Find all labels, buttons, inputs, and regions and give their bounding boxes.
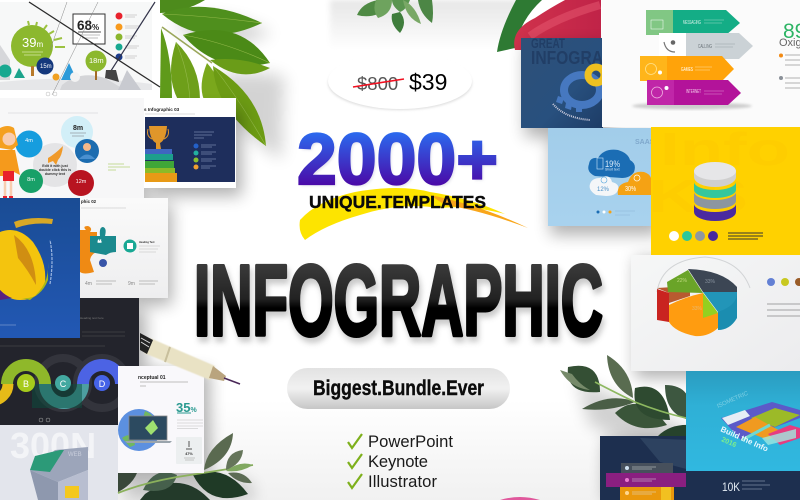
panel: circles slide: 4m bbox=[25, 138, 33, 144]
panel: puzzle slide: phic 02 bbox=[81, 199, 97, 204]
panel: puzzle slide bbox=[80, 198, 168, 298]
headline: 2000+: 2000+ bbox=[297, 120, 498, 200]
arrow: games: GAMES bbox=[681, 67, 693, 73]
icon: orange cloud: 30% bbox=[625, 186, 636, 193]
panel: puzzle slide: ❝ bbox=[97, 238, 102, 248]
icon: blue 4m circle bbox=[16, 130, 42, 158]
icon: blue gear bbox=[556, 75, 600, 112]
panel: dark slide: D bbox=[99, 379, 106, 389]
icon: gold sphere bbox=[0, 218, 53, 300]
panel: circles slide: 12m bbox=[76, 179, 87, 185]
panel: top left slide: 68% bbox=[77, 18, 99, 33]
panel: cloud slide: SAAS bbox=[635, 139, 655, 146]
panel: yellow slide: KS bbox=[648, 170, 748, 222]
card: 47% bbox=[176, 437, 202, 464]
pill: biggest bundle ever: Biggest.Bundle.Ever bbox=[313, 377, 484, 400]
pill: biggest bundle ever bbox=[287, 368, 510, 409]
panel: gear slide bbox=[521, 35, 604, 128]
chart: 3d pie: 33% bbox=[705, 279, 716, 285]
panel: dark slide: Heading text here bbox=[80, 316, 104, 320]
panel: gear slide: INFOGRA bbox=[531, 48, 603, 68]
panel: top left slide bbox=[0, 0, 160, 98]
panel: conceptual slide: 35% bbox=[176, 400, 197, 415]
arrow: calling: CALLING bbox=[698, 44, 712, 50]
arrow: games bbox=[640, 56, 734, 81]
panel: circles slide: Edit it with just bbox=[42, 164, 69, 168]
item: Keynote: Keynote bbox=[368, 452, 428, 471]
icon: red 12m circle bbox=[68, 170, 94, 196]
chart: 3d pie: 33% bbox=[692, 306, 703, 312]
new price: $39 bbox=[409, 69, 447, 95]
arrow: calling bbox=[659, 33, 753, 59]
panel: cloud slide bbox=[548, 128, 655, 226]
panel: gear slide: GREAT bbox=[531, 35, 565, 51]
brush stroke bbox=[300, 188, 528, 240]
icon: light blue 8m circle bbox=[61, 116, 93, 148]
chart: 3d pie: 22% bbox=[677, 278, 688, 284]
panel: pie slide bbox=[631, 255, 800, 371]
icon: globe and laptop bbox=[118, 409, 172, 451]
text box: 68% bbox=[73, 14, 105, 44]
panel: cyan slide: ISOMETRIC bbox=[716, 391, 750, 410]
arrow: messaging: MESSAGING bbox=[683, 20, 701, 26]
icon: green 8m circle bbox=[19, 169, 43, 193]
panel: navy slide: 10K bbox=[722, 480, 740, 494]
panel: puzzle slide: 9m bbox=[128, 281, 135, 287]
illustration: leaves right bbox=[560, 355, 691, 436]
panel: circles slide: 8m bbox=[27, 177, 35, 183]
panel: puzzle slide: 4m bbox=[85, 281, 92, 287]
panel: dark slide bbox=[0, 298, 139, 425]
icon: tree 15m bbox=[36, 58, 54, 74]
chart: isometric blocks bbox=[721, 402, 800, 445]
headline: 2000+: 2000+ bbox=[299, 122, 500, 202]
legend: pie dots bbox=[767, 278, 800, 286]
illustration: pen bbox=[140, 333, 240, 384]
illustration: leaves bottom bbox=[118, 433, 253, 500]
panel: blue gold slide bbox=[0, 198, 80, 338]
icon: yellow gear bbox=[588, 67, 604, 83]
panel: conceptual slide: 47% bbox=[185, 452, 193, 456]
illustration: pink flower bottom bbox=[500, 497, 540, 500]
legend: circles bbox=[669, 231, 718, 241]
panel: circles slide bbox=[0, 98, 144, 198]
arrow: messaging bbox=[646, 10, 740, 35]
illustration: red flower top right bbox=[497, 0, 601, 52]
chart: coloured steps bbox=[145, 149, 177, 182]
icon: tree 39m bbox=[11, 25, 53, 67]
icon: girl figure bbox=[0, 126, 20, 197]
panel: puzzle slide: Heading Text bbox=[139, 241, 155, 244]
list: stacked cards bbox=[606, 463, 686, 500]
panel: top left slide: 18m bbox=[89, 56, 104, 65]
illustration: leaves top centre bbox=[357, 0, 433, 33]
illustration: green leaves top bbox=[160, 0, 270, 146]
panel: dark slide: C bbox=[60, 379, 67, 389]
panel: circles slide: double click this is bbox=[39, 168, 71, 172]
panel: dark slide: B bbox=[23, 379, 29, 389]
leaf shadows bbox=[125, 17, 690, 500]
title: infographic bbox=[194, 245, 605, 362]
panel: cyan slide: Build the Info bbox=[719, 425, 770, 454]
panel: conceptual slide bbox=[118, 366, 204, 473]
panel: circles slide: dummy text bbox=[45, 172, 66, 176]
subheading: unique templates: UNIQUE.TEMPLATES bbox=[309, 192, 486, 212]
item: PowerPoint: PowerPoint bbox=[368, 432, 453, 451]
panel: top left slide: 15m bbox=[40, 64, 52, 70]
panel: circles slide: 8m bbox=[73, 125, 83, 132]
panel: arrows slide bbox=[602, 0, 800, 127]
icon: blue cloud bbox=[588, 150, 635, 178]
price badge bbox=[328, 53, 472, 110]
chart: arcs B C D bbox=[0, 358, 127, 408]
panel: top left slide: 39m bbox=[22, 35, 43, 50]
icon: blue cloud: Short text bbox=[605, 168, 620, 172]
panel: cube slide: WEB bbox=[68, 452, 82, 458]
panel: cube slide: 300N bbox=[10, 425, 96, 466]
panel: yellow slide bbox=[648, 123, 800, 255]
chart: cylinder stack bbox=[694, 162, 736, 221]
icon: blue cloud: 19% bbox=[605, 159, 620, 169]
list: coloured dots bbox=[116, 12, 139, 60]
panel: cyan slide bbox=[686, 371, 800, 471]
old price: $800 bbox=[357, 73, 398, 94]
panel: yellow slide: Info bbox=[660, 123, 790, 175]
panel: conceptual slide: nceptual 01 bbox=[138, 375, 166, 381]
icon: rocket circle bbox=[33, 143, 77, 187]
panel: trophy slide bbox=[144, 98, 236, 188]
icon: person circle bbox=[75, 139, 99, 163]
list: supported formats bbox=[348, 432, 453, 491]
arrow: internet bbox=[647, 80, 741, 105]
cross lines bbox=[29, 2, 160, 87]
icon: white cloud: 12% bbox=[597, 187, 610, 193]
statistic: oxygen bbox=[779, 20, 800, 49]
panel: cyan slide: 2016 bbox=[720, 436, 737, 449]
panel: cube slide bbox=[0, 425, 118, 500]
chart: 3d pie bbox=[657, 269, 737, 336]
arrow: internet: INTERNET bbox=[686, 89, 701, 95]
icon: trophy bbox=[148, 126, 168, 151]
item: Illustrator: Illustrator bbox=[368, 472, 437, 491]
panel: navy slide bbox=[600, 436, 800, 500]
panel: trophy slide: s Infographic 03 bbox=[144, 107, 180, 112]
icon: tree 18m bbox=[86, 50, 106, 72]
